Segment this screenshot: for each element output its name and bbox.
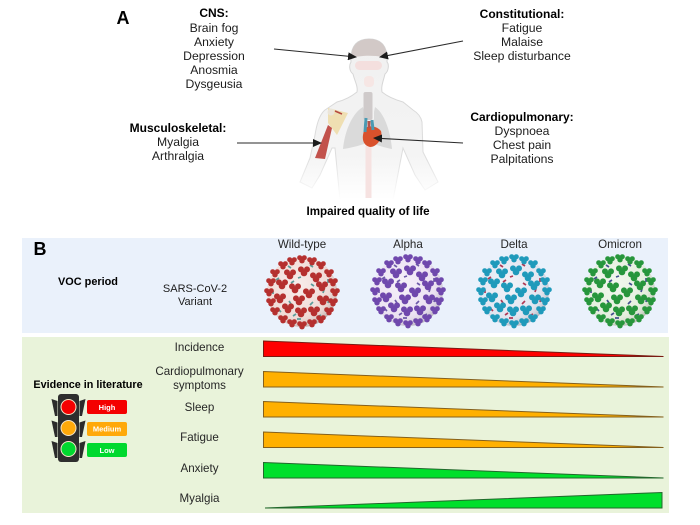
constitutional symptoms: Constitutional: bbox=[480, 7, 564, 21]
alpha variant bbox=[370, 238, 446, 328]
delta variant: Delta bbox=[500, 238, 528, 251]
heart bbox=[363, 118, 381, 147]
delta variant bbox=[476, 238, 552, 328]
CNS symptoms: Dysgeusia bbox=[186, 77, 243, 91]
cardiopulmonary symptoms: Chest pain bbox=[493, 138, 551, 152]
legend: low: Low bbox=[100, 446, 115, 455]
arrows bbox=[237, 41, 463, 143]
lungs bbox=[343, 107, 364, 149]
face bbox=[355, 61, 382, 87]
legend: medium bbox=[87, 422, 127, 436]
CNS symptoms: CNS: bbox=[199, 6, 229, 20]
legend: medium: Medium bbox=[93, 424, 121, 434]
wedge: anxiety bbox=[264, 462, 664, 478]
musculoskeletal symptoms: Musculoskeletal: bbox=[130, 121, 226, 135]
row label: cardiopulmonary symptoms bbox=[155, 365, 244, 392]
wild-type variant bbox=[264, 238, 340, 329]
arrow: CNS bbox=[274, 49, 356, 57]
omicron variant: Omicron bbox=[598, 238, 642, 251]
wedge: cardiopulmonary symptoms bbox=[264, 372, 664, 387]
arrow: cardiopulmonary bbox=[374, 138, 463, 143]
shoulder blade bbox=[328, 108, 348, 135]
human body illustration bbox=[300, 39, 438, 200]
icon: traffic light bbox=[52, 394, 86, 462]
legend: high bbox=[87, 400, 127, 414]
CNS symptoms: Depression bbox=[183, 49, 245, 63]
constitutional symptoms: Sleep disturbance bbox=[473, 49, 571, 63]
panel: VOC period bbox=[22, 238, 668, 333]
constitutional symptoms: Fatigue bbox=[502, 21, 543, 35]
variant label: Variant bbox=[178, 296, 212, 308]
VOC period heading: VOC period bbox=[58, 276, 118, 288]
brain bbox=[352, 39, 386, 58]
spine bbox=[366, 146, 372, 198]
wedge: incidence bbox=[264, 341, 664, 356]
legend: high: High bbox=[99, 403, 116, 412]
cardiopulmonary symptoms: Cardiopulmonary: bbox=[470, 110, 574, 124]
row label: cardiopulmonary symptoms: symptoms bbox=[173, 379, 226, 392]
constitutional symptoms bbox=[473, 7, 571, 63]
panel label A: A bbox=[116, 8, 130, 28]
row label: anxiety: Anxiety bbox=[180, 462, 219, 475]
impaired quality of life caption: Impaired quality of life bbox=[306, 205, 430, 218]
CNS symptoms: Anxiety bbox=[194, 35, 235, 49]
CNS symptoms bbox=[183, 6, 245, 91]
CNS symptoms: Brain fog bbox=[190, 21, 238, 35]
variant label bbox=[163, 283, 227, 308]
variant label: SARS-CoV-2 bbox=[163, 283, 227, 295]
arrow: musculoskeletal bbox=[237, 142, 321, 144]
legend: low bbox=[87, 443, 127, 457]
wild-type variant: Wild-type bbox=[278, 238, 326, 251]
musculoskeletal symptoms bbox=[130, 121, 226, 163]
cardiopulmonary symptoms: Palpitations bbox=[490, 152, 554, 166]
row label: cardiopulmonary symptoms: Cardiopulmonary bbox=[155, 365, 244, 378]
alpha variant: Alpha bbox=[393, 238, 423, 251]
musculoskeletal symptoms: Myalgia bbox=[157, 135, 199, 149]
row label: sleep: Sleep bbox=[185, 401, 214, 414]
row label: incidence: Incidence bbox=[175, 341, 224, 354]
row label: myalgia: Myalgia bbox=[180, 492, 220, 505]
trachea bbox=[364, 92, 372, 120]
row label: fatigue: Fatigue bbox=[180, 431, 219, 444]
musculoskeletal symptoms: Arthralgia bbox=[152, 149, 204, 163]
arrow: constitutional bbox=[380, 41, 463, 57]
cardiopulmonary symptoms: Dyspnoea bbox=[495, 124, 550, 138]
arm muscle bbox=[315, 125, 332, 159]
omicron variant bbox=[582, 238, 658, 328]
constitutional symptoms: Malaise bbox=[501, 35, 543, 49]
body silhouette bbox=[300, 39, 438, 200]
wedge: myalgia bbox=[265, 492, 662, 508]
panel: evidence in literature bbox=[22, 337, 669, 513]
wedge: sleep bbox=[264, 402, 664, 417]
cardiopulmonary symptoms bbox=[470, 110, 574, 166]
CNS symptoms: Anosmia bbox=[190, 63, 238, 77]
wedge: fatigue bbox=[264, 432, 664, 448]
panel label B: B bbox=[34, 239, 46, 259]
evidence heading: Evidence in literature bbox=[33, 379, 143, 391]
